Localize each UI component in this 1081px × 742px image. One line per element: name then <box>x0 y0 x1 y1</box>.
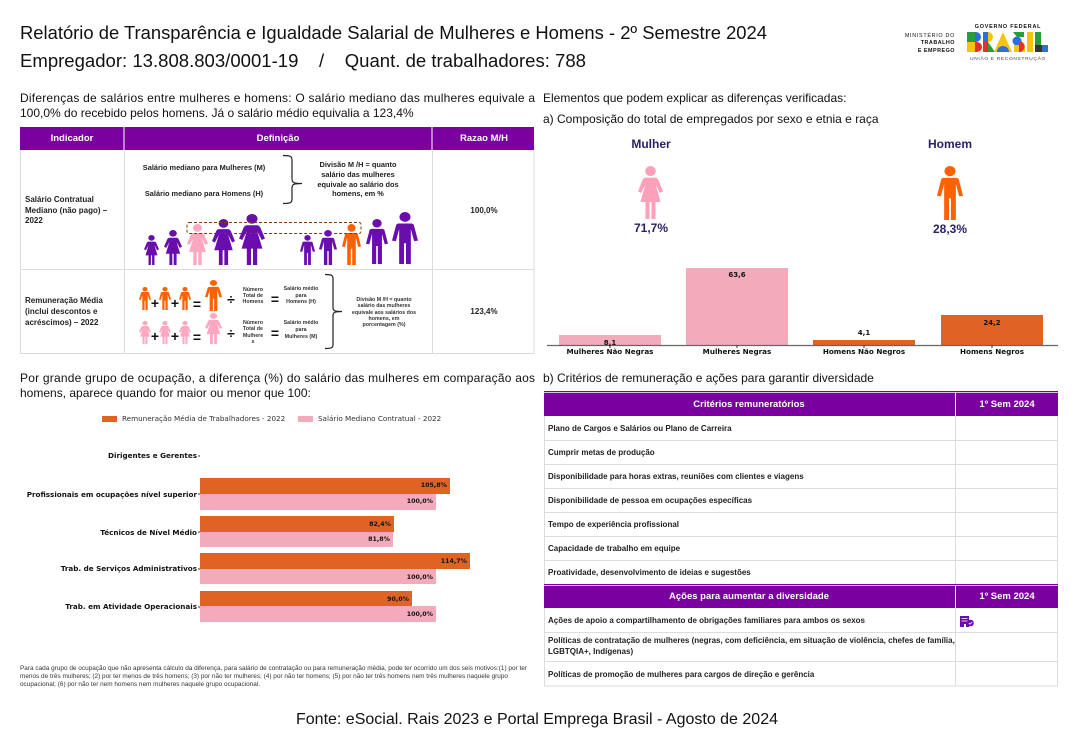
definition: remuneração média: Homens <box>243 299 263 305</box>
bar chart: composição: Mulheres Negras <box>703 347 771 356</box>
definition: salário mediano: Salário mediano para Homens (H) <box>145 189 264 198</box>
pictogram: homem: Homem <box>928 137 972 151</box>
logo: ministério e governo federal: UNIÃO E RECONSTRUÇÃO <box>970 55 1046 62</box>
title: Empregador: 13.808.803/0001-19 / Quant. de trabalhadores: 788 <box>20 50 586 71</box>
panel: critérios remuneratórios: Plano de Cargos e Salários ou Plano de Carreira <box>548 424 732 433</box>
definition: remuneração média: + <box>171 295 179 311</box>
definition: remuneração média: = <box>193 329 201 345</box>
pictogram: mulher <box>631 137 671 235</box>
icons: pessoas mediana <box>144 212 418 265</box>
heading: elementos: a) Composição do total de empregados por sexo e etnia e raça <box>543 112 879 126</box>
definition: remuneração média: = <box>271 325 279 341</box>
bars: operacionais: 90,0% <box>387 596 410 603</box>
row label: salário contratual: Mediano (não pago) – <box>25 206 108 215</box>
panel: critérios remuneratórios: 1º Sem 2024 <box>979 399 1035 410</box>
pictogram: mulher: Mulher <box>631 137 671 151</box>
pictogram: homem <box>928 137 972 236</box>
panel: ações para diversidade <box>544 584 1058 679</box>
pictogram: mulher: 71,7% <box>634 221 668 235</box>
definition: remuneração média: para <box>295 327 307 333</box>
legend <box>102 414 441 423</box>
intro text: grande grupo de ocupação: Por grande grupo de ocupação, a diferença (%) do salário das mulheres em comparação aos <box>20 371 535 385</box>
panel: critérios remuneratórios: Proatividade, desenvolvimento de ideias e sugestões <box>548 568 751 577</box>
definition: remuneração média: ÷ <box>227 291 235 307</box>
definition: remuneração média: homens, em <box>369 316 400 322</box>
panel: critérios remuneratórios: Tempo de experiência profissional <box>548 520 679 529</box>
bars: técnicos: 81,8% <box>368 536 391 543</box>
panel: ações para diversidade: LGBTQIA+, Indígenas) <box>548 647 633 656</box>
pictogram: homem: 28,3% <box>933 222 967 236</box>
table header: Definição <box>257 133 300 144</box>
panel: ações para diversidade: Ações para aumentar a diversidade <box>669 591 829 602</box>
bars: técnicos <box>200 516 394 547</box>
definition: remuneração média: Divisão M /H = quanto <box>356 297 412 303</box>
logo: ministério e governo federal: E EMPREGO <box>918 48 955 54</box>
bar chart: composição: Mulheres Não Negras <box>567 347 653 356</box>
row label: remuneração média: acréscimos) – 2022 <box>25 318 99 327</box>
definition: remuneração média: + <box>171 328 179 344</box>
definition: salário mediano: Salário mediano para Mulheres (M) <box>143 163 266 172</box>
table header: Indicador <box>51 133 94 144</box>
definition: remuneração média: = <box>193 296 201 312</box>
category labels: Trab. em Atividade Operacionais <box>65 602 197 611</box>
category labels <box>27 451 197 611</box>
definition: salário mediano: equivale ao salário dos <box>317 180 399 189</box>
footnote: menos de três mulheres; (2) por ter menos de três homens; (3) por não ter mulheres; (4) por não ter homens; (5) por não ter três homens nem três mulheres naquele grupo <box>20 673 508 680</box>
bar chart: composição: Homens Não Negros <box>823 347 905 356</box>
bar chart: composição: 8,1 <box>604 339 616 347</box>
intro text: diferenças de salários: Diferenças de salários entre mulheres e homens: O salário mediano das mulheres equivale a <box>20 91 535 105</box>
bars: operacionais: 100,0% <box>407 611 434 618</box>
definition: salário mediano: homens, em % <box>332 189 384 198</box>
footnote: ocupacional; (6) por não ter nem homens nem mulheres naquele grupo ocupacional. <box>20 681 260 688</box>
row label: remuneração média: (inclui descontos e <box>25 307 98 316</box>
definition: remuneração média <box>139 274 416 348</box>
category labels: Técnicos de Nível Médio <box>100 528 197 537</box>
logo: ministério e governo federal: MINISTÉRIO DO <box>905 32 955 39</box>
definition: remuneração média: Homens (H) <box>286 299 316 305</box>
icon: prédio com check <box>960 616 974 627</box>
logo: ministério e governo federal <box>905 24 1048 62</box>
table header: Razao M/H <box>460 133 508 144</box>
heading: critérios: b) Critérios de remuneração e ações para garantir diversidade <box>543 371 874 385</box>
intro text: diferenças de salários: 100,0% do recebido pelos homens. Já o salário médio equivalia a 123,4% <box>20 106 414 120</box>
definition: remuneração média: Total de <box>243 326 263 332</box>
row label: salário contratual: 2022 <box>25 216 43 225</box>
category labels: Dirigentes e Gerentes <box>108 451 197 460</box>
value: 123,4%: 123,4% <box>470 307 498 316</box>
definition: remuneração média: + <box>151 328 159 344</box>
row label: remuneração média: Remuneração Média <box>25 296 103 305</box>
definition: salário mediano: salário das mulheres <box>321 170 395 179</box>
bars: operacionais <box>200 591 436 622</box>
definition: salário mediano: Divisão M /H = quanto <box>320 160 397 169</box>
definition: remuneração média: salário das mulheres <box>358 303 410 309</box>
bar chart: composição: 24,2 <box>983 319 1001 327</box>
bar chart: ocupações <box>27 414 470 622</box>
definition: remuneração média: Salário médio <box>284 320 319 326</box>
category labels: Trab. de Serviços Administrativos <box>61 564 197 573</box>
definition: remuneração média: + <box>151 295 159 311</box>
footnote: Para cada grupo de ocupação que não apresenta cálculo da diferença, para salário de contratação ou para remuneração média, pode ter ocorrido um dos seis motivos:(1) por ter <box>20 665 528 672</box>
legend: Remuneração Média de Trabalhadores - 2022 <box>122 414 285 423</box>
definition: remuneração média: Mulheres (M) <box>285 334 318 340</box>
logo: ministério e governo federal: TRABALHO <box>921 40 955 46</box>
definition: salário mediano <box>143 156 399 204</box>
title: Relatório de Transparência e Igualdade Salarial de Mulheres e Homens - 2º Semestre 2024 <box>20 22 767 43</box>
heading: elementos: Elementos que podem explicar as diferenças verificadas: <box>543 91 846 105</box>
bars: profissionais <box>200 478 450 510</box>
row label: salário contratual: Salário Contratual <box>25 195 94 204</box>
definition: remuneração média: s <box>252 339 255 345</box>
bar chart: composição: Homens Negros <box>960 347 1024 356</box>
bars: técnicos: 82,4% <box>369 521 392 528</box>
definition: remuneração média: para <box>295 293 307 299</box>
definition: remuneração média: = <box>271 291 279 307</box>
value: 100,0%: 100,0% <box>470 206 498 215</box>
table header <box>20 127 534 150</box>
panel: tabela de indicadores <box>20 127 534 354</box>
bar chart: composição: 4,1 <box>858 329 870 337</box>
panel: critérios remuneratórios: Disponibilidade de pessoa em ocupações específicas <box>548 496 753 505</box>
definition: remuneração média: porcentagem (%) <box>363 322 406 328</box>
definition: remuneração média: ÷ <box>227 325 235 341</box>
panel: critérios remuneratórios: Critérios remuneratórios <box>693 399 805 410</box>
definition: remuneração média: Mulhere <box>243 333 263 339</box>
definition: remuneração média: Número <box>243 320 264 326</box>
title <box>20 22 767 71</box>
definition: remuneração média: Total de <box>243 293 263 299</box>
bars: administrativos: 114,7% <box>441 558 468 565</box>
definition: remuneração média: Salário médio <box>284 286 319 292</box>
intro text: grande grupo de ocupação: homens, aparece quando for maior ou menor que 100: <box>20 386 311 400</box>
bar chart: composição: 63,6 <box>728 271 746 279</box>
panel: critérios remuneratórios: Disponibilidade para horas extras, reuniões com clientes e viagens <box>548 472 804 481</box>
panel: ações para diversidade: Políticas de promoção de mulheres para cargos de direção e gerência <box>548 670 815 679</box>
panel: ações para diversidade: Políticas de contratação de mulheres (negras, com deficiência, em situação de violência, chefes de família, <box>548 636 955 645</box>
fonte: Fonte: eSocial. Rais 2023 e Portal Emprega Brasil - Agosto de 2024 <box>296 711 778 728</box>
panel: critérios remuneratórios: Capacidade de trabalho em equipe <box>548 544 681 553</box>
panel: critérios remuneratórios: Cumprir metas de produção <box>548 448 655 457</box>
definition: remuneração média: equivale aos salários dos <box>352 310 416 316</box>
bar chart: composição <box>547 268 1058 356</box>
bars: profissionais: 105,8% <box>421 482 448 489</box>
panel: critérios remuneratórios <box>544 391 1058 686</box>
panel: ações para diversidade: Ações de apoio a compartilhamento de obrigações familiares para ambos os sexos <box>548 616 866 625</box>
heading: elementos <box>543 91 879 126</box>
definition: remuneração média: Número <box>243 287 264 293</box>
category labels: Profissionais em ocupações nível superior <box>27 490 197 499</box>
legend: Salário Mediano Contratual - 2022 <box>318 414 441 423</box>
bars: administrativos <box>200 553 470 584</box>
bars: profissionais: 100,0% <box>407 498 434 505</box>
bars: administrativos: 100,0% <box>407 574 434 581</box>
logo: ministério e governo federal: GOVERNO FEDERAL <box>975 24 1041 30</box>
panel: ações para diversidade: 1º Sem 2024 <box>979 591 1035 602</box>
